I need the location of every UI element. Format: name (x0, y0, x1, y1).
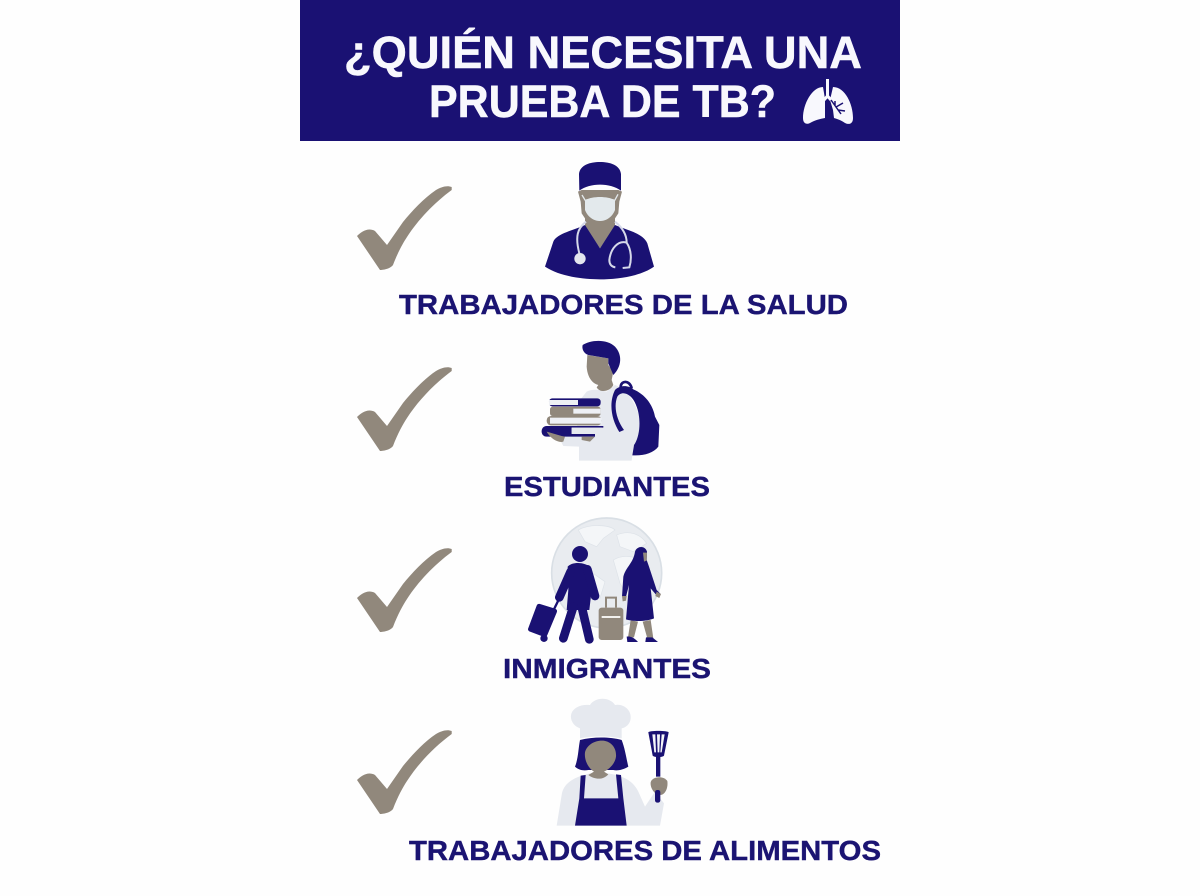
check mark 1 (357, 186, 452, 270)
check mark 4 (357, 730, 452, 814)
icon: food worker (557, 699, 669, 826)
label: trabajadores de alimentos: TRABAJADORES DE ALIMENTOS (409, 835, 881, 866)
icon: health worker (545, 162, 654, 279)
icon: student (542, 341, 659, 461)
label: trabajadores de la salud: TRABAJADORES DE LA SALUD (399, 289, 848, 320)
title text: ¿QUIÉN NECESITA UNA (344, 27, 862, 78)
label: inmigrantes: INMIGRANTES (503, 653, 711, 684)
label: estudiantes: ESTUDIANTES (504, 471, 710, 502)
title text: PRUEBA DE TB? (429, 76, 776, 127)
title text (344, 27, 862, 127)
title banner (300, 0, 900, 141)
check mark 3 (357, 548, 452, 632)
icon: immigrants (528, 518, 662, 642)
icon: lungs (803, 79, 853, 124)
check mark 2 (357, 367, 452, 451)
